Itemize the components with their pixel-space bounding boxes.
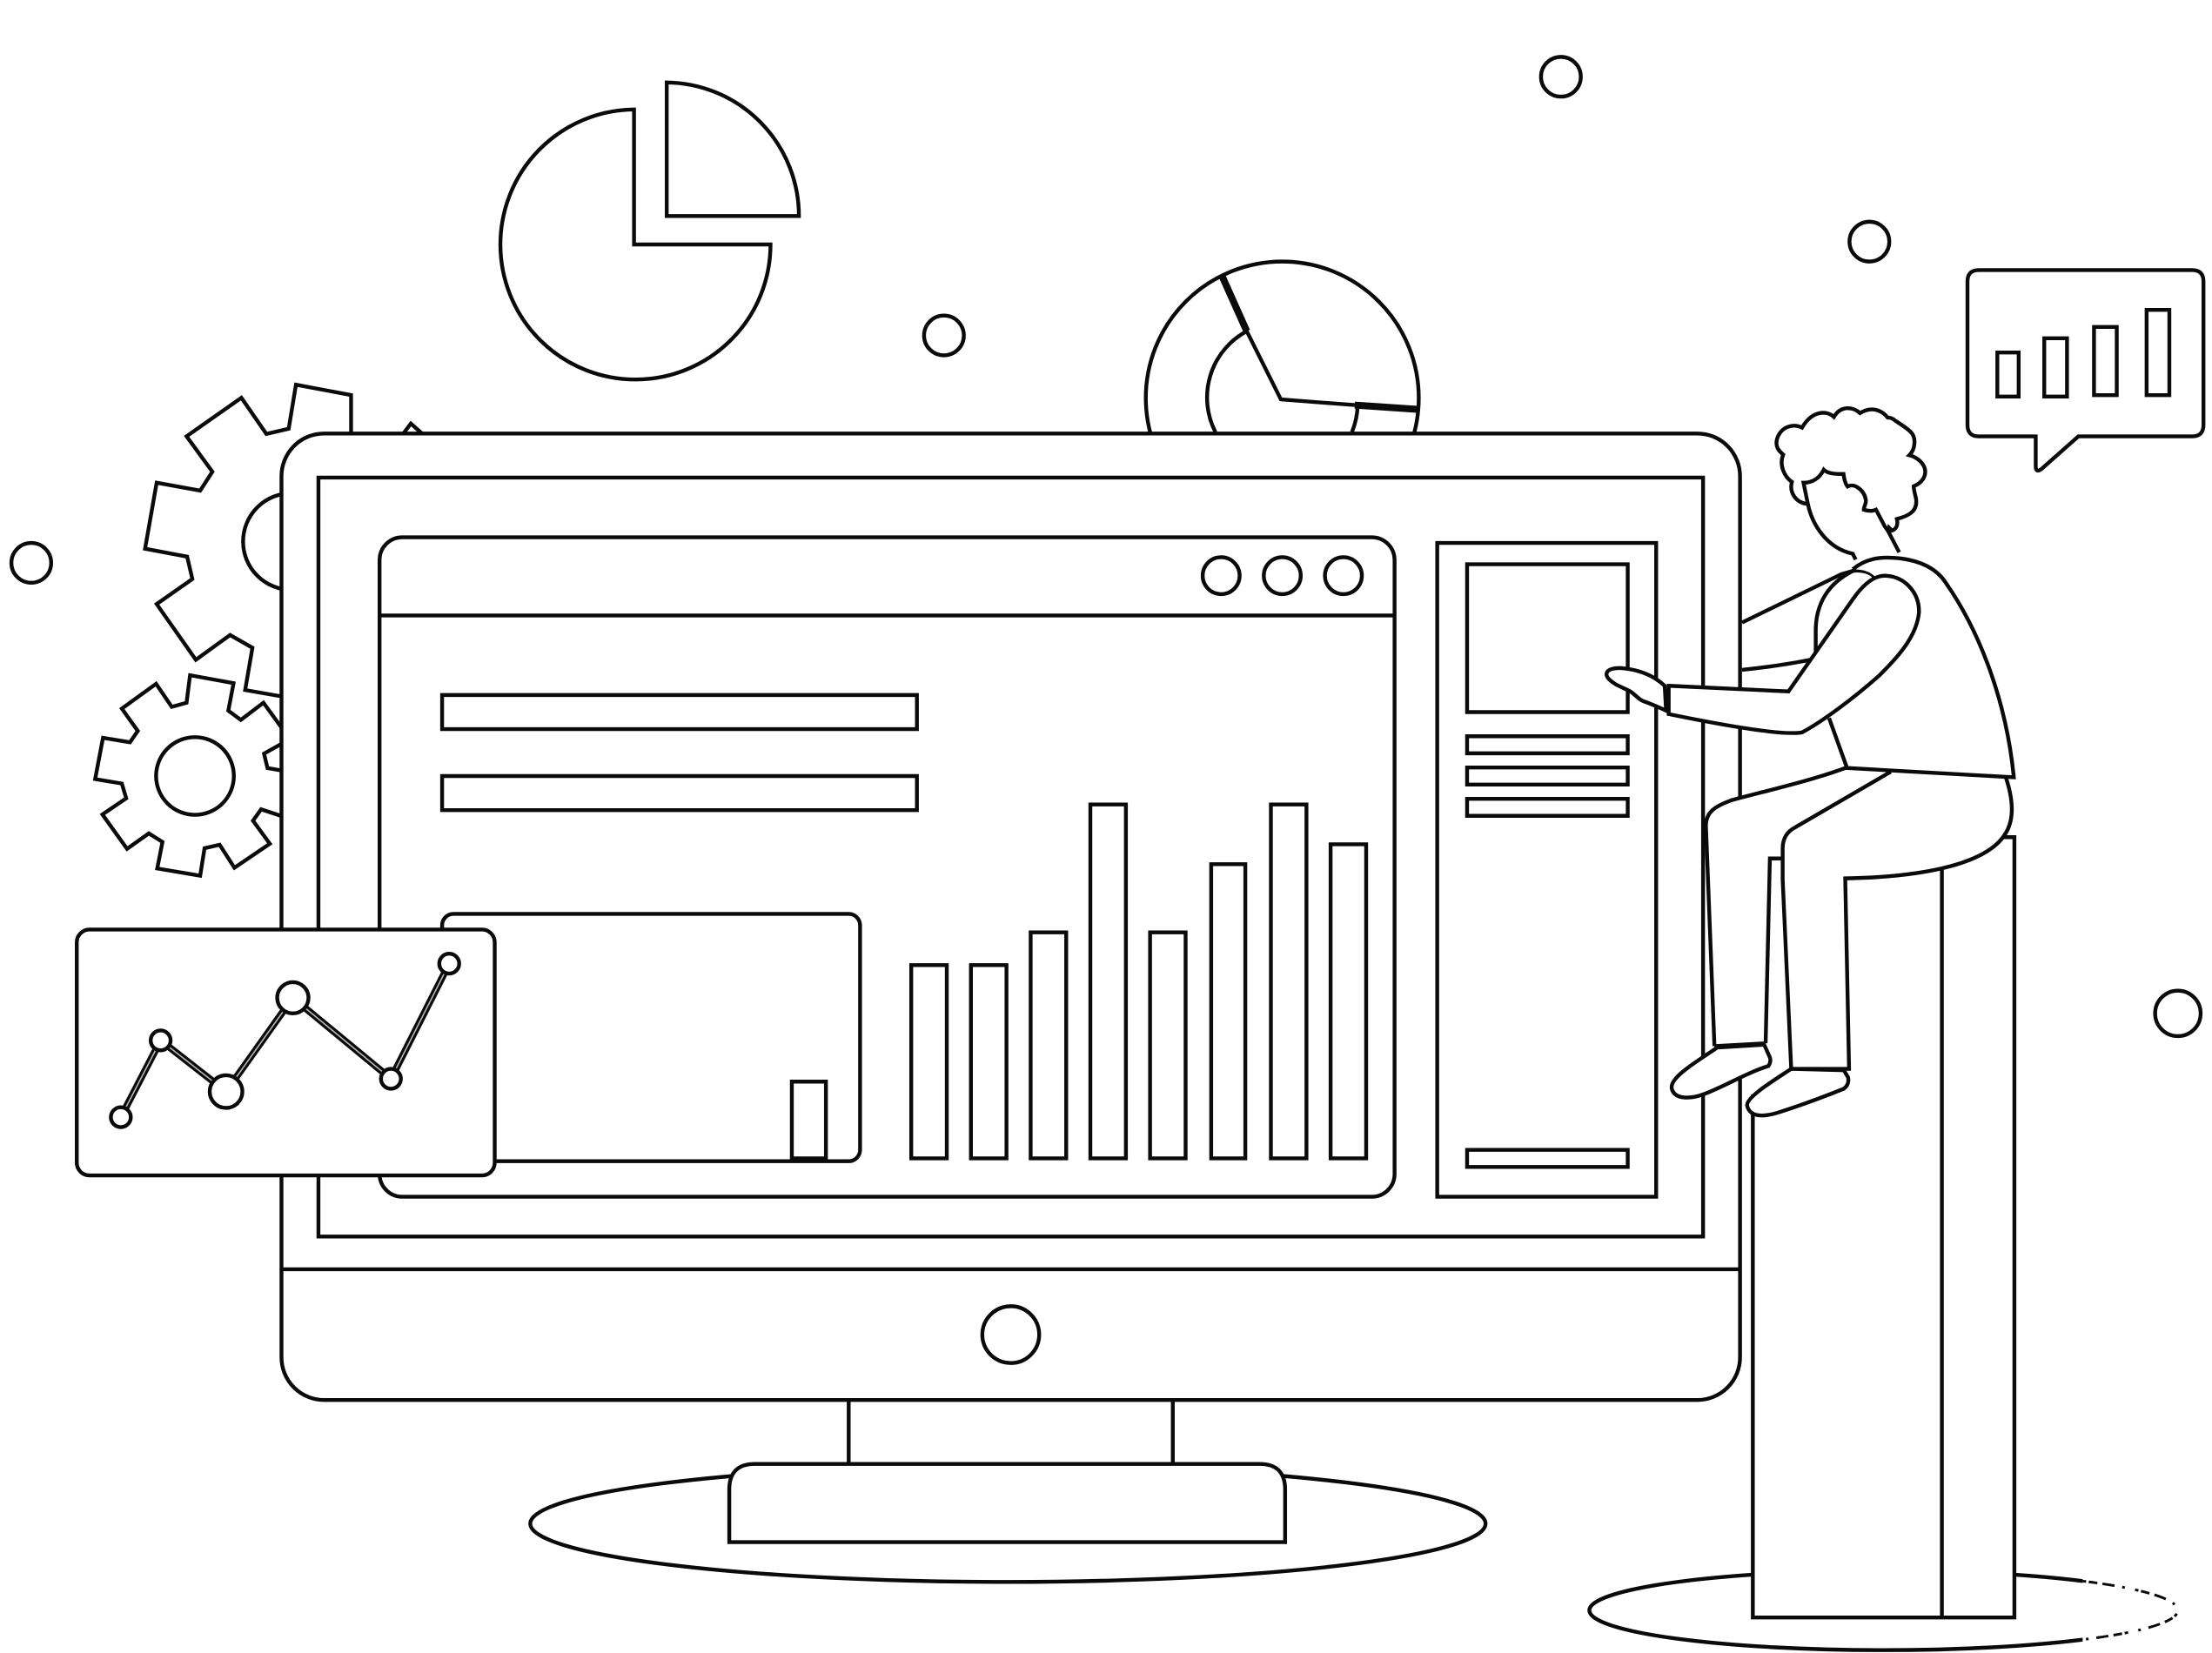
hair and face: [1776, 408, 1925, 559]
side panel: [1438, 543, 1656, 1197]
monitor screen: [318, 478, 1703, 1236]
window buttons: [1203, 557, 1362, 594]
line chart: [111, 954, 459, 1128]
back shoe: [1672, 1045, 1770, 1098]
donut chart behind monitor: [1146, 262, 1418, 534]
floor ellipse: [1589, 1561, 2189, 1653]
speech bubble with bar chart: [1967, 270, 2203, 471]
browser window dashboard: [379, 538, 1395, 1197]
monitor stand: [729, 1393, 1285, 1543]
shirt: [1829, 558, 2014, 777]
icon: large gear: [145, 385, 424, 698]
inner card: [442, 914, 860, 1161]
text placeholder bars: [442, 695, 917, 810]
line chart card: [77, 929, 495, 1175]
power button: [982, 1306, 1039, 1363]
near arm: [1669, 576, 1919, 733]
far arm: [1742, 571, 1874, 670]
background dots: [11, 57, 2201, 1036]
monitor: [281, 433, 1740, 1400]
near shoe: [1747, 1069, 1848, 1115]
near leg and hips: [1747, 772, 2012, 1115]
back leg: [1672, 767, 1848, 1098]
icon: small gear: [95, 675, 287, 876]
large pie chart with cut-out slice: [500, 83, 799, 379]
hand: [1606, 668, 1666, 711]
bar chart: [911, 805, 1366, 1158]
pillar: [1753, 837, 2014, 1617]
monitor base ellipse: [530, 1465, 1485, 1582]
person sitting on pillar: [1606, 408, 2014, 1115]
